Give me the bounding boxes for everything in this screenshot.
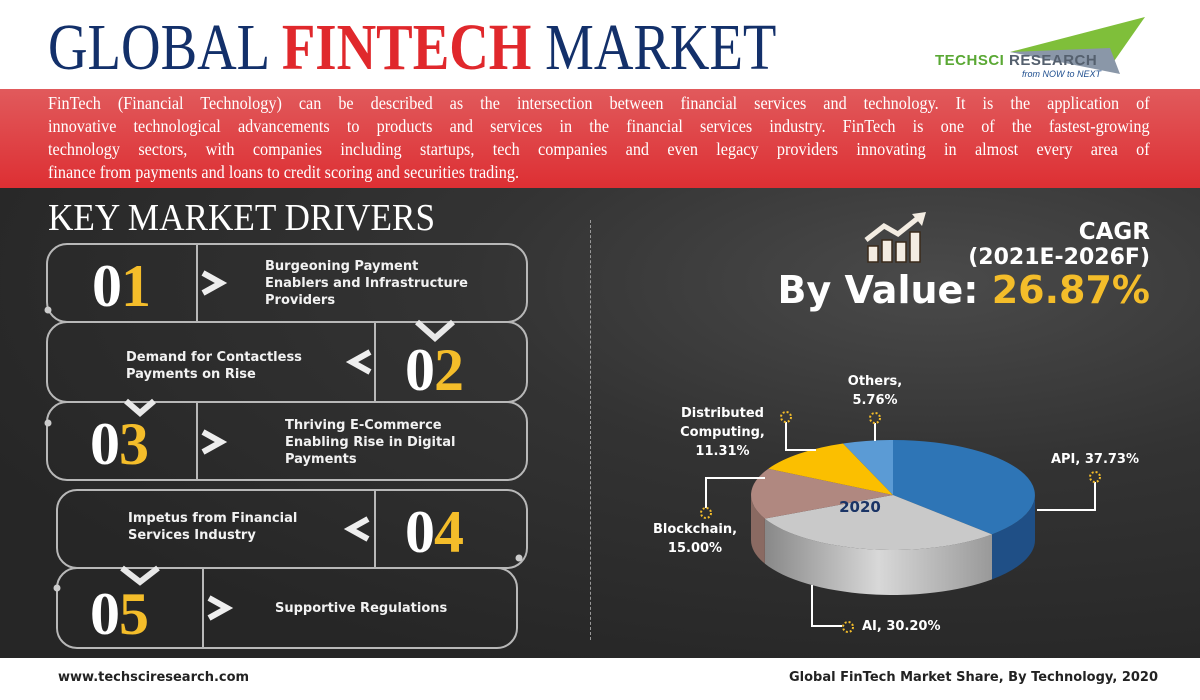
CAGR block: CAGR: [1079, 219, 1150, 245]
driver 04: Services Industry: [128, 528, 256, 543]
driver 03: [90, 411, 455, 477]
intro band: finance from payments and loans to credit scoring and securities trading.: [48, 162, 519, 182]
driver 01: [92, 253, 468, 319]
pie label: Distributed Computing: Distributed: [681, 406, 764, 421]
driver 04: Impetus from Financial: [128, 511, 297, 526]
intro band: FinTech (Financial Technology) can be described as the intersection between financial services and technology. It is the application of: [48, 93, 1150, 113]
driver 05: 05: [90, 581, 148, 647]
intro band: [0, 89, 1200, 188]
driver 04: 04: [405, 499, 463, 565]
heading: key market drivers: KEY MARKET DRIVERS: [48, 197, 435, 239]
pie label: Others: Others,: [848, 374, 902, 389]
driver 02: Payments on Rise: [126, 367, 256, 382]
driver 04: [128, 499, 463, 565]
pie label: Others: [848, 374, 902, 408]
CAGR block: By Value: 26.87%: [778, 268, 1150, 312]
driver 02: Demand for Contactless: [126, 350, 302, 365]
CAGR block: (2021E-2026F): [968, 245, 1150, 270]
driver 01: Providers: [265, 293, 335, 308]
driver 03: Enabling Rise in Digital: [285, 435, 455, 450]
footer: [0, 658, 1200, 700]
dark background panel: [0, 188, 1200, 658]
driver 01: Burgeoning Payment: [265, 259, 418, 274]
driver 03: 03: [90, 411, 148, 477]
driver 03: Thriving E-Commerce: [285, 418, 442, 433]
driver 01: 01: [92, 253, 150, 319]
logo: TechSci Research: from NOW to NEXT: [1022, 69, 1101, 79]
header: title: GLOBAL FINTECH MARKET: [48, 11, 776, 84]
pie label: Blockchain: 15.00%: [668, 541, 722, 556]
icon: growth chart: [864, 212, 926, 263]
CAGR block: [778, 219, 1150, 312]
driver 03: Payments: [285, 452, 357, 467]
driver 05: Supportive Regulations: [275, 601, 447, 616]
intro band: technology sectors, with companies including startups, tech companies and even legacy providers innovating in almost every area of: [48, 139, 1150, 159]
footer: www.techsciresearch.com: [58, 670, 249, 685]
dashed divider: [590, 220, 591, 640]
pie label: Distributed Computing: Computing,: [680, 425, 765, 440]
footer: Global FinTech Market Share, By Technology, 2020: [789, 670, 1158, 685]
pie label: API: API, 37.73%: [1051, 452, 1139, 467]
logo: TechSci Research: [935, 17, 1145, 79]
intro band: innovative technological advancements to products and services in the financial services industry. FinTech is one of the fastest-growing: [48, 116, 1150, 136]
driver 05: [90, 581, 447, 647]
drivers flow outline: [44, 243, 528, 649]
pie label: Blockchain: [653, 522, 737, 556]
driver 02: 02: [405, 337, 463, 403]
driver 01: Enablers and Infrastructure: [265, 276, 468, 291]
pie label: Distributed Computing: 11.31%: [695, 444, 750, 459]
pie chart: 2020: [839, 498, 881, 516]
pie label: Distributed Computing: [680, 406, 765, 459]
logo: TechSci Research: TECHSCI RESEARCH: [935, 52, 1097, 69]
pie label: Blockchain: Blockchain,: [653, 522, 737, 537]
pie label: AI: AI, 30.20%: [862, 619, 941, 634]
driver 02: [126, 337, 463, 403]
pie label: Others: 5.76%: [852, 393, 898, 408]
